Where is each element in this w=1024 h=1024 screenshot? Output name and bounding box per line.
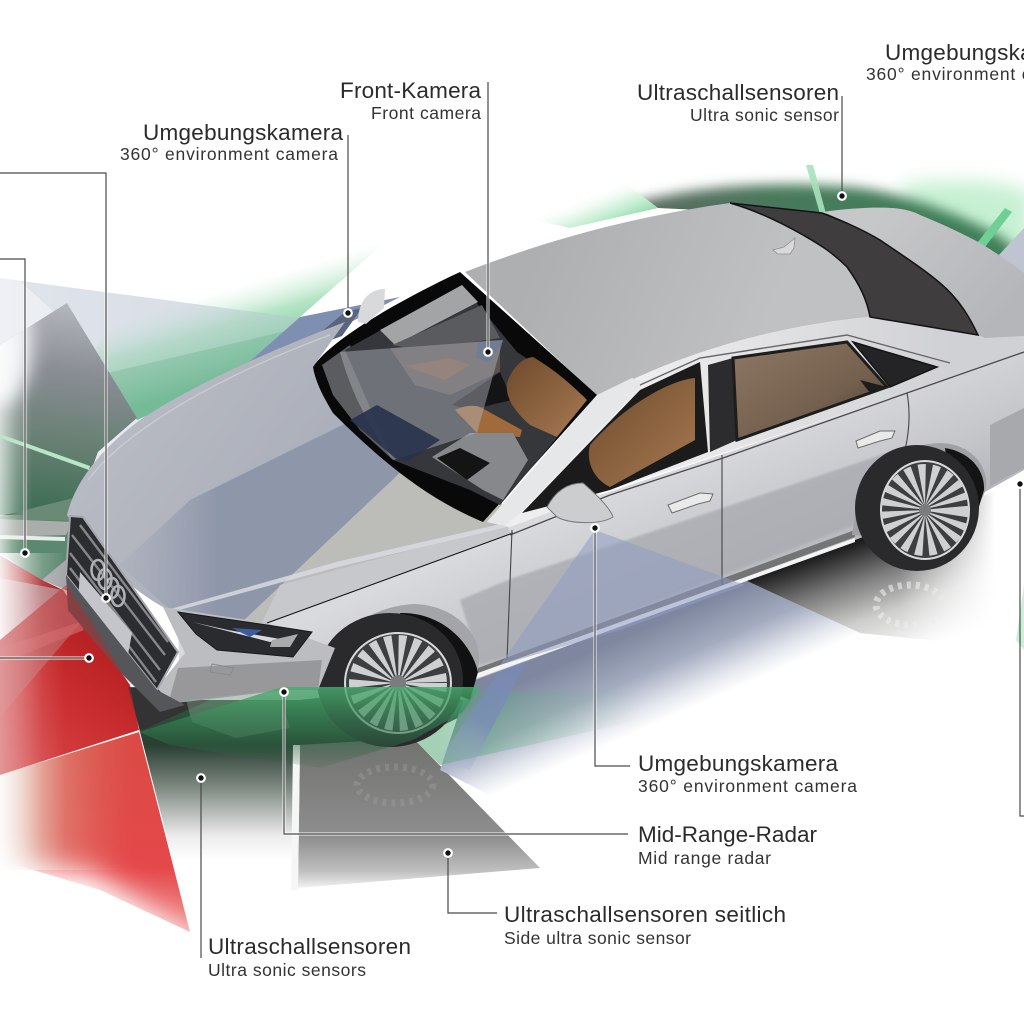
label: environment camera top left: Umgebungskamera	[143, 120, 343, 145]
car: side mirror	[547, 483, 613, 523]
label: front camera	[340, 78, 481, 123]
car: hood highlight crease	[88, 335, 330, 480]
overlay: bumper reflection	[186, 690, 290, 738]
label: environment camera at mirror: Umgebungskamera	[638, 751, 838, 776]
car: headlight	[178, 612, 312, 657]
label: ultrasonic sensor top: Ultra sonic sensor	[690, 105, 839, 125]
label: environment camera at mirror: 360° environment camera	[638, 776, 857, 796]
car: hood blue overlay	[120, 377, 477, 623]
car: licence plate	[78, 572, 132, 660]
overlay: green field over bumper and wheel	[139, 687, 480, 768]
label: ultrasonic sensor top	[637, 80, 839, 125]
label: environment camera top left	[120, 120, 343, 164]
car: four rings badge	[92, 560, 124, 606]
label: ultrasonic sensors bottom	[208, 934, 411, 980]
car: brown dash trim	[405, 358, 470, 380]
car: left cowl band	[322, 345, 393, 460]
car: grille	[66, 516, 178, 690]
car: front seat seen through door	[589, 378, 695, 487]
label: front camera: Front-Kamera	[340, 78, 481, 103]
car: dark upper trim	[392, 305, 500, 350]
panel: shadow and fields under the car	[413, 470, 1024, 800]
label: side ultrasonic sensor	[504, 902, 786, 948]
car: lower door panel shading	[460, 452, 890, 665]
car: hood shut line	[267, 533, 513, 623]
car	[66, 203, 1024, 747]
car: door handles	[668, 431, 895, 513]
car: front wheel arch trim	[312, 604, 479, 700]
car: front lower lip	[66, 575, 185, 712]
car: dark footwell	[452, 372, 512, 410]
label: mid range radar: Mid-Range-Radar	[638, 822, 818, 847]
label: environment camera at mirror	[638, 751, 857, 796]
panel: left front-corner fields	[0, 229, 400, 592]
car: wheel arch dark front	[400, 613, 478, 700]
car: roof side rail	[487, 317, 1024, 527]
overlay: rear wheel reflection	[876, 585, 944, 625]
car: side trim line	[510, 352, 1024, 535]
car: bumper lower shade	[168, 660, 322, 704]
label: ultrasonic sensors bottom: Ultra sonic sensors	[208, 960, 366, 980]
overlay: front wheel reflection	[357, 767, 433, 803]
label: side ultrasonic sensor: Ultraschallsensoren seitlich	[504, 902, 786, 927]
car: window frame line	[640, 335, 950, 385]
car: rear wheel arch trim	[852, 443, 986, 540]
car: trunk lid	[823, 208, 1024, 338]
overlay: red field over grille	[0, 585, 139, 775]
car: dashboard	[390, 340, 500, 395]
car: rear door window	[733, 342, 887, 440]
car: sill highlight	[475, 538, 855, 679]
car: translucent camera field	[340, 340, 503, 460]
panel: green and grey ground fields	[128, 680, 540, 935]
car: rear wheel	[855, 445, 979, 571]
car: grey upper trim	[380, 285, 478, 345]
car: hood grey overlay	[241, 400, 507, 623]
label: ultrasonic sensors bottom: Ultraschallsensoren	[208, 934, 411, 959]
car: rear window	[730, 203, 978, 335]
car: front seat	[507, 357, 587, 437]
car: fog lamp cover	[210, 664, 234, 675]
label: mid range radar: Mid range radar	[638, 848, 771, 868]
car: instrument hood	[432, 433, 528, 500]
car: roof	[465, 203, 870, 397]
car: rear window pillar shade	[860, 380, 887, 393]
car: rear bumper panel	[990, 408, 1024, 486]
car: blue tint in windshield	[350, 405, 440, 462]
car: body side	[178, 348, 1024, 700]
car: sill dark band	[478, 530, 855, 676]
car: upper interior	[345, 285, 585, 505]
car: windshield	[313, 272, 597, 522]
panel: red front radar fields	[0, 553, 205, 1000]
car: hood reflection streak	[167, 523, 507, 612]
car: quarter window	[853, 342, 937, 387]
label: environment camera top left: 360° environment camera	[120, 144, 338, 164]
label: ultrasonic sensor top: Ultraschallsensoren	[637, 80, 839, 105]
car: front door window	[522, 358, 737, 513]
label: front camera: Front camera	[371, 103, 481, 123]
car: A-pillar	[487, 378, 645, 526]
panel: rear sensor fields	[544, 165, 1024, 273]
overlay: blue camera field on door	[500, 530, 745, 665]
car: front camera dark area	[476, 340, 503, 362]
car: far-side mirror	[358, 289, 385, 324]
car: seat cushion	[455, 406, 522, 437]
car: front bumper	[157, 607, 335, 702]
car: fender light strip	[262, 524, 510, 623]
car: hood	[67, 322, 510, 623]
car: door shut lines	[507, 393, 909, 660]
car: rear wheel arch dark	[945, 448, 984, 520]
car: shark-fin antenna	[773, 238, 795, 254]
car: front wheel	[317, 613, 463, 747]
car: B-pillar	[708, 358, 737, 452]
car: head-up display slot	[437, 448, 490, 480]
label: side ultrasonic sensor: Side ultra sonic sensor	[504, 928, 691, 948]
label: mid range radar	[638, 822, 818, 868]
callout dots	[21, 192, 1024, 857]
label: environment camera top right	[866, 40, 1024, 84]
